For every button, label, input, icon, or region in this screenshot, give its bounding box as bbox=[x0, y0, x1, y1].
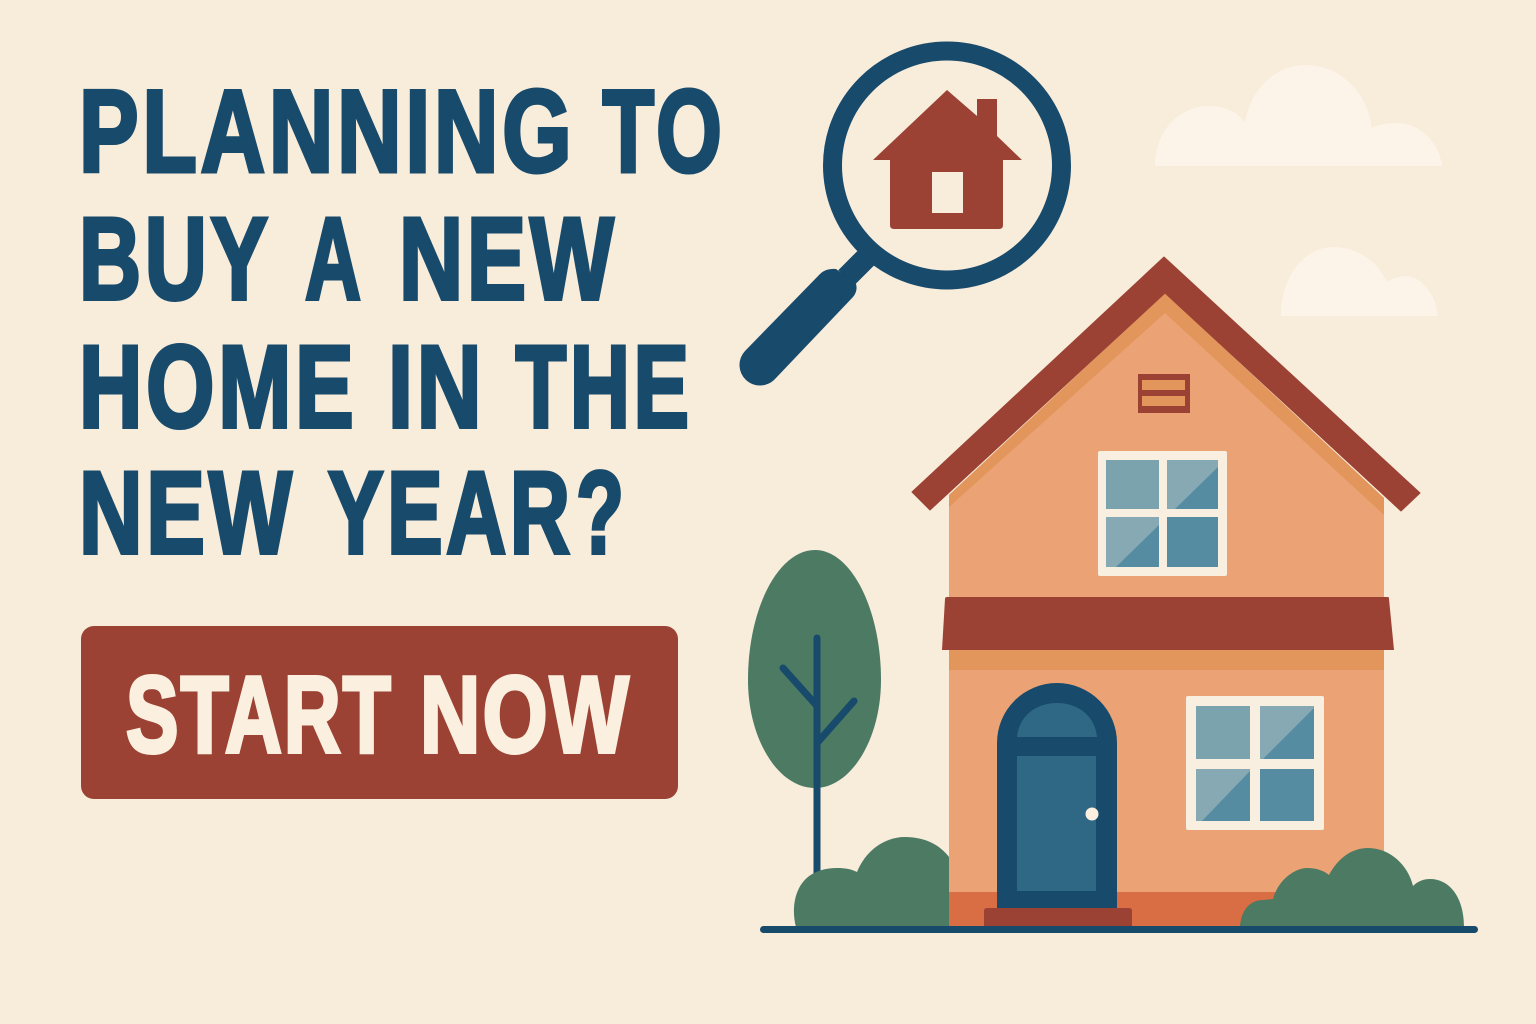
upper window bbox=[1098, 451, 1227, 576]
attic vent bbox=[1138, 374, 1190, 413]
title bbox=[79, 66, 726, 578]
illustration: tree bbox=[748, 550, 881, 880]
title: TO bbox=[602, 66, 726, 196]
title: YEAR bbox=[328, 447, 574, 578]
door bbox=[997, 683, 1117, 908]
icon: cloud large bbox=[1155, 65, 1442, 166]
roof bbox=[912, 257, 1420, 511]
button: start now bbox=[81, 626, 678, 799]
ground line bbox=[760, 926, 1478, 933]
title: THE bbox=[516, 321, 692, 452]
button: start now: NOW bbox=[420, 654, 631, 776]
illustration: right bush bbox=[1240, 848, 1464, 927]
title: IN bbox=[388, 321, 486, 452]
lower window bbox=[1186, 696, 1324, 830]
illustration: left bush bbox=[794, 837, 949, 927]
title: A bbox=[305, 193, 361, 324]
title: NEW bbox=[79, 447, 296, 578]
title: ? bbox=[576, 447, 624, 578]
floor band shadow bbox=[949, 650, 1384, 670]
title: HOME bbox=[79, 321, 358, 452]
title: BUY bbox=[79, 193, 272, 324]
door step bbox=[984, 908, 1132, 926]
icon: cloud small bbox=[1281, 247, 1438, 316]
button: start now: START bbox=[126, 654, 393, 776]
foundation bbox=[949, 892, 1384, 926]
roof underside shadow bbox=[949, 293, 1384, 515]
title: NEW bbox=[399, 193, 618, 324]
house upper wall bbox=[949, 293, 1384, 892]
illustration: house bbox=[912, 257, 1420, 926]
icon: magnifying glass with house bbox=[739, 51, 1062, 386]
floor band bbox=[942, 597, 1394, 650]
title: PLANNING bbox=[79, 66, 576, 196]
